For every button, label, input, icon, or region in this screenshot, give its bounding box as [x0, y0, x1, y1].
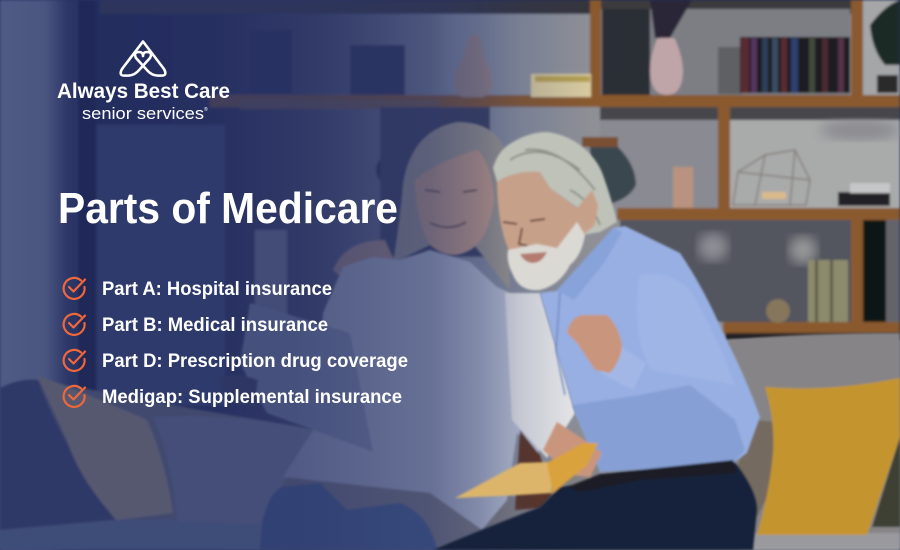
man hair: [493, 132, 617, 235]
books on top shelf: [740, 37, 850, 93]
sofa: [0, 333, 900, 550]
shirt cuff: [600, 347, 646, 390]
sofa back: [0, 333, 900, 550]
middle shelf compartments: [600, 107, 720, 208]
shirt highlight shoulder: [637, 274, 735, 385]
man belt: [567, 460, 737, 492]
blouse sleeve: [505, 293, 575, 458]
logo: [57, 42, 230, 123]
woman: [220, 122, 575, 550]
check icon D: [64, 350, 85, 371]
eyes and nose shadow: [503, 219, 545, 246]
item: Part A: [64, 278, 332, 300]
logo wordmark: Always Best Care: [57, 80, 230, 103]
woman eyes and smile: [425, 190, 477, 227]
man trousers: [433, 460, 757, 550]
man: [433, 132, 760, 550]
pink cylinder: [673, 167, 693, 208]
lower shelf compartment: [620, 220, 852, 322]
check icon Medigap: [64, 386, 85, 407]
left room objects: [78, 0, 96, 395]
woman hand: [220, 375, 258, 407]
label D: Part D: Prescription drug coverage: [102, 351, 408, 372]
cushion: dark left: [0, 380, 115, 530]
lower shelf books: [808, 260, 848, 322]
check icon A: [64, 278, 85, 299]
top shelf compartment: [600, 0, 850, 95]
sofa seat left: [0, 520, 280, 550]
item: Part B: [64, 314, 328, 336]
shirt shadow folds: [572, 385, 745, 472]
yellow books pile: [531, 74, 591, 97]
item: Medigap: [64, 386, 402, 408]
man face: [497, 172, 598, 262]
geodesic lamp: [733, 150, 810, 205]
envelope: [455, 443, 598, 498]
dried flowers: [650, 0, 692, 38]
brown sofa gap: [515, 430, 552, 510]
man shirt: [540, 226, 760, 472]
shirt placket: [556, 292, 565, 395]
registered mark: ®: [204, 106, 208, 113]
fist: [567, 315, 622, 373]
cushion: pale left: [153, 416, 313, 525]
label Medigap: Medigap: Supplemental insurance: [102, 387, 402, 408]
sphere ornament: [766, 299, 790, 323]
sofa seat right: [740, 533, 900, 550]
cushion: yellow: [757, 378, 900, 535]
dark glass vase: [590, 147, 636, 204]
check icon B: [64, 314, 85, 335]
pink vase: [650, 38, 683, 95]
logo tagline: senior services: [82, 105, 204, 123]
hair streaks: [510, 150, 600, 225]
label B: Part B: Medical insurance: [102, 315, 328, 336]
woman face: [415, 150, 494, 255]
cushion: dark green: [872, 437, 900, 527]
cushion: taupe: [735, 420, 793, 517]
cushion: orange left: [37, 375, 173, 520]
pale bottle vase: [454, 34, 492, 97]
hand on shoulder: [333, 240, 395, 280]
title: Parts of Medicare: [58, 184, 398, 233]
item: Part D: [64, 350, 408, 372]
man mouth: [520, 252, 547, 263]
checklist: [64, 278, 408, 408]
shirt collar: [557, 228, 622, 300]
woman hand holding envelope: [543, 422, 602, 477]
shelves: [210, 0, 900, 333]
man beard: [508, 222, 585, 290]
logo icon: [121, 42, 165, 76]
blouse: [283, 250, 573, 530]
letter: [240, 303, 373, 452]
jeans: [260, 483, 437, 550]
plant: [870, 0, 900, 65]
woman hair: [393, 122, 510, 290]
label A: Part A: Hospital insurance: [102, 279, 332, 300]
camera: [838, 192, 890, 206]
